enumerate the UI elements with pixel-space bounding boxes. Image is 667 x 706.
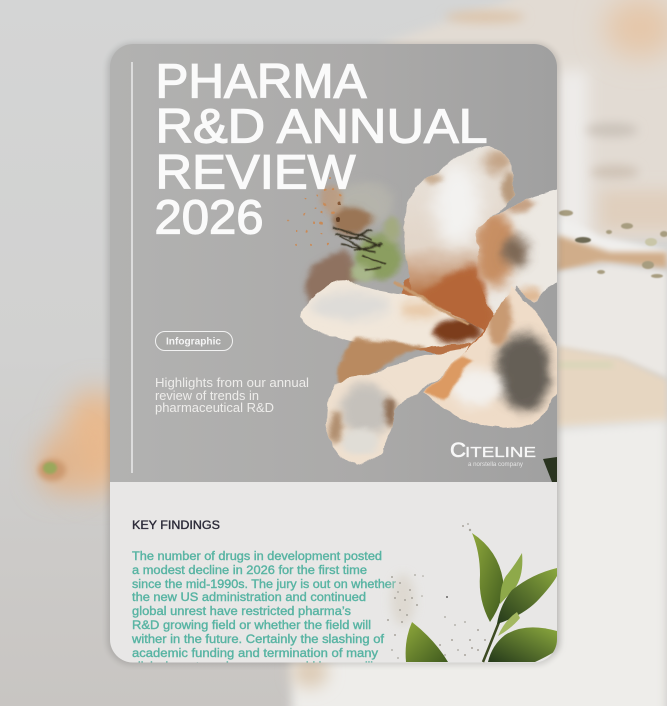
- bottom right petal: [423, 286, 557, 428]
- Citeline logo: C: [450, 439, 466, 462]
- subtitle: [155, 376, 309, 415]
- card shadow: [107, 43, 560, 665]
- subtitle: review of trends in: [155, 389, 259, 403]
- findings panel: [110, 482, 557, 674]
- title: [154, 56, 488, 244]
- body text: clinical grants and programs could have an ill: [132, 660, 373, 674]
- Citeline logo: ITELINE: [465, 444, 536, 461]
- tag pill: Infographic: [156, 332, 232, 350]
- Citeline logo: a norstella company: [468, 462, 523, 468]
- left petal: [300, 280, 484, 348]
- title: PHARMA: [156, 56, 366, 108]
- leaf: [472, 533, 503, 622]
- body text: academic funding and termination of many: [132, 646, 379, 660]
- vertical rule: [131, 62, 133, 473]
- lower left petal: [326, 346, 469, 465]
- dust smudge: [391, 574, 415, 626]
- subtitle: pharmaceutical R&D: [155, 401, 274, 415]
- flower illustration: [287, 145, 570, 470]
- leaf: [498, 612, 520, 636]
- leaf: [500, 553, 522, 604]
- body text: The number of drugs in development posted: [132, 549, 382, 563]
- style of flower: [395, 282, 470, 326]
- body text: global unrest have restricted pharma’s: [132, 604, 351, 618]
- body text: wither in the future. Certainly the slashing of: [131, 632, 385, 646]
- back left petal: [304, 250, 362, 302]
- stamens: [332, 201, 385, 270]
- title: 2026: [154, 192, 264, 244]
- speckles: [387, 523, 486, 659]
- flower core underlay: [402, 277, 494, 355]
- top petal: [403, 146, 516, 292]
- pollen haze: [342, 185, 390, 220]
- title: REVIEW: [156, 146, 356, 200]
- subtitle: Highlights from our annual: [155, 376, 309, 390]
- body text: [132, 550, 396, 662]
- body text: a modest decline in 2026 for the first time: [132, 563, 367, 577]
- card: [110, 44, 570, 674]
- body text: the new US administration and continued: [132, 590, 366, 604]
- lower left back petal: [336, 339, 425, 388]
- right petal: [476, 190, 557, 316]
- title: R&D ANNUAL: [156, 100, 488, 154]
- leaf illustration: [387, 523, 557, 662]
- tag pill: Infographic: Infographic: [166, 336, 221, 348]
- body text: R&D growing field or whether the field will: [132, 618, 371, 632]
- dark leaf corner: [543, 457, 557, 482]
- throat of flower: [420, 265, 492, 345]
- body text: since the mid-1990s. The jury is out on whether: [132, 577, 396, 591]
- leaf: [406, 622, 448, 662]
- green pollen: [354, 235, 402, 279]
- leaf: [497, 568, 557, 624]
- Citeline logo: [450, 442, 536, 468]
- heading: key findings: KEY FINDINGS: [132, 520, 220, 532]
- orange dust: [287, 177, 346, 247]
- leaf: [488, 627, 557, 662]
- cover panel: [110, 44, 570, 482]
